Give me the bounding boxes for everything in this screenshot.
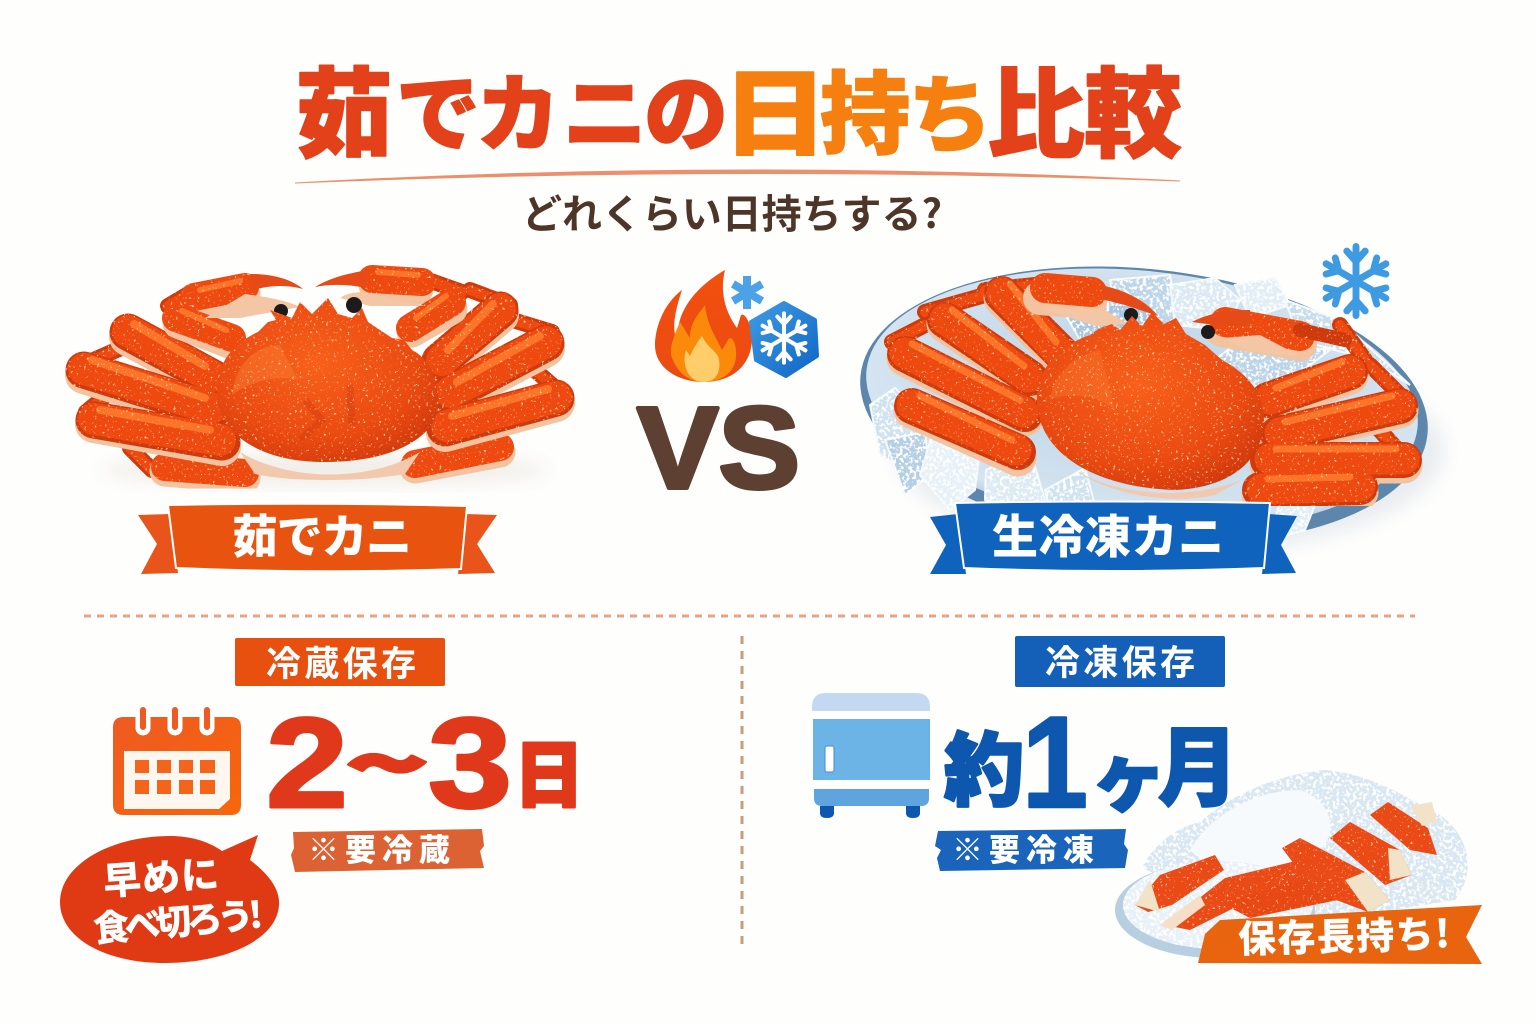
tag: keep refrigerated: ※要冷蔵 (308, 825, 450, 870)
value: 2~3 days: 3 (428, 692, 512, 835)
crab: raw frozen (892, 284, 1405, 499)
plate with ice (846, 240, 1445, 570)
value: about 1 month (944, 689, 1238, 835)
title: ニ (563, 48, 647, 169)
title: 茹 (295, 36, 393, 178)
value: 2~3 days: 2 (266, 692, 348, 835)
title: カ (476, 48, 560, 169)
title: ち (908, 49, 992, 170)
icon: flame (655, 270, 752, 382)
icon: freezer (812, 693, 930, 818)
frozen crab legs on plate (1115, 770, 1468, 958)
tag: keep frozen: ※要冷凍 (952, 825, 1094, 870)
value: 2~3 days: 日 (514, 717, 584, 822)
speech bubble: 早めに (101, 843, 221, 906)
leg pieces (1135, 802, 1437, 930)
title: で (396, 48, 480, 169)
ice cubes (870, 275, 1410, 540)
title: 較 (1084, 36, 1182, 178)
banner: long storage: 保存長持ち! (1237, 903, 1451, 964)
value: 2~3 days (266, 692, 584, 835)
speech bubble: 食べ切ろう! (91, 886, 265, 953)
icon: large snowflake (1326, 246, 1386, 316)
value: about 1 month: ヶ (1092, 719, 1166, 826)
VS: VS (637, 383, 800, 513)
icon: small asterisk snow (733, 276, 762, 309)
crab: boiled (80, 270, 560, 486)
title (295, 36, 1182, 178)
subtitle: どれくらい日持ちする? (522, 182, 942, 240)
pincers (250, 274, 303, 290)
underside (240, 452, 420, 480)
label: refrigerated: 冷蔵保存 (266, 636, 416, 687)
banner: frozen crab (930, 501, 1297, 574)
label: frozen: 冷凍保存 (1045, 635, 1195, 686)
eyes (274, 304, 288, 318)
title: 比 (987, 36, 1085, 178)
title: 日 (722, 39, 828, 175)
value: about 1 month: 1 (1022, 689, 1088, 835)
title underline (295, 170, 1180, 183)
snow mound (1142, 770, 1468, 925)
banner: boiled crab (138, 501, 497, 574)
title: の (644, 48, 728, 169)
speech bubble (60, 835, 279, 963)
icon: snowflake hexagon (751, 303, 817, 376)
dividers (84, 614, 1415, 618)
icon: calendar (113, 710, 241, 815)
value: 2~3 days: ~ (345, 699, 429, 820)
value: about 1 month: 月 (1158, 698, 1238, 823)
banner: frozen crab: 生冷凍カニ (992, 501, 1224, 567)
banner: boiled crab: 茹でカニ (232, 501, 412, 567)
plate (1115, 862, 1315, 958)
value: about 1 month: 約 (944, 707, 1024, 823)
title: 持 (820, 42, 910, 172)
